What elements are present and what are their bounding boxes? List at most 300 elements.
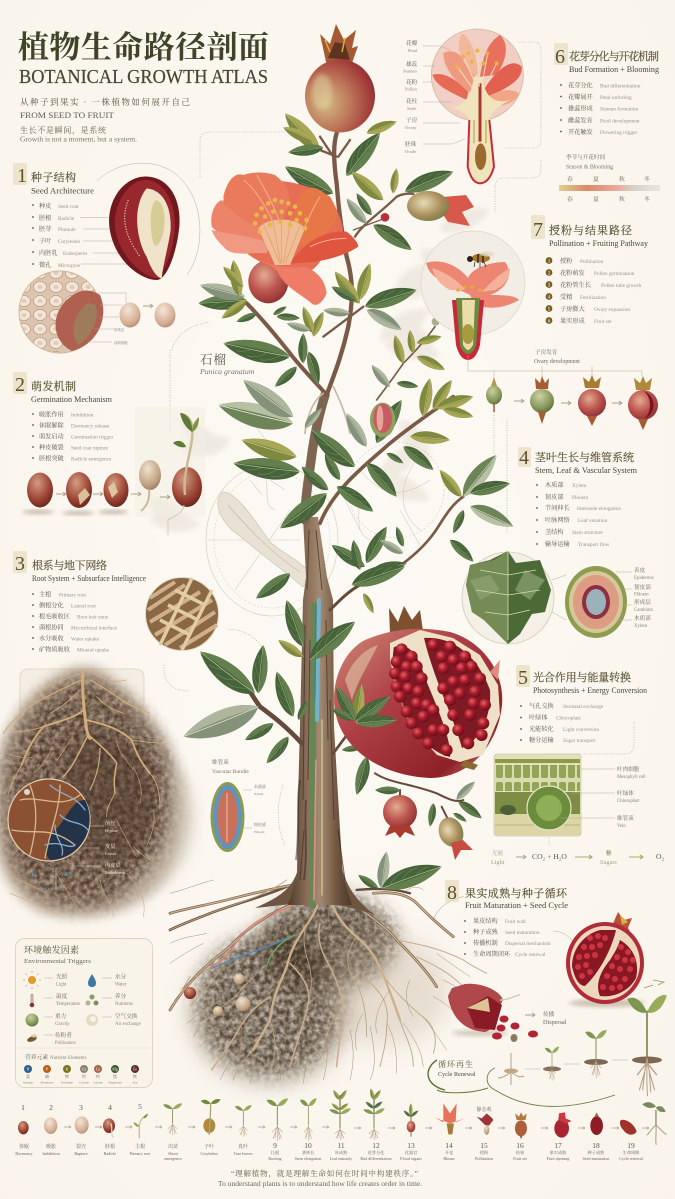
numbered list: 授粉 (560, 257, 573, 265)
list: 水分吸收 (39, 634, 65, 642)
section 8: fruit maturation: 传播 (543, 1010, 555, 1018)
aril chambers (393, 646, 450, 757)
list: 种皮 (39, 202, 51, 210)
list: Micropyle (58, 263, 81, 269)
environmental triggers panel: Iron (133, 1082, 138, 1084)
list: 木质部 (545, 481, 564, 489)
roots: lower mass and soil shadow (170, 880, 487, 1084)
stage labels: 5 (138, 1102, 142, 1111)
season chart: 夏 (593, 195, 599, 203)
list (32, 202, 88, 269)
season chart: 夏 (593, 175, 599, 183)
list: Primary root (59, 592, 86, 598)
list: Leaf venation (578, 517, 608, 524)
stage labels: 19 (627, 1141, 635, 1150)
environmental triggers panel: Water (115, 982, 127, 988)
equation: 糖 (606, 849, 612, 857)
section 5: photosynthesis: Photosynthesis + Energy Conversion (533, 686, 647, 695)
stage labels: Imbibition (42, 1151, 60, 1156)
list: Internode elongation (577, 506, 621, 512)
stage labels: Bloom (443, 1156, 455, 1161)
dark root undersides (170, 883, 453, 1010)
environmental triggers panel: Magnesium (108, 1082, 122, 1084)
stage labels: Seed maturation (583, 1156, 609, 1161)
list: 微孔 (39, 261, 51, 269)
environmental triggers panel: Pollinators (55, 1041, 76, 1046)
dotted connector arrows (164, 42, 634, 845)
environmental triggers panel: 光照 (56, 972, 68, 980)
vascular strip (312, 600, 322, 905)
stage labels: emergence (164, 1156, 182, 1161)
environmental triggers panel: 养分 (115, 992, 127, 1000)
vascular bundle detail: Xylem (254, 792, 264, 796)
root network (170, 880, 487, 1083)
section 4: stem and vascular: Stem, Leaf & Vascular System (535, 466, 638, 475)
list: 子叶 (39, 237, 52, 245)
section 3: root system (13, 551, 218, 654)
flower labels: 胚珠 (405, 140, 417, 148)
stage labels: 种子成熟 (588, 1149, 605, 1156)
list: 输导运输 (545, 540, 570, 548)
season chart: 冬 (644, 195, 650, 203)
broken fruit and scattered seeds (448, 984, 538, 1042)
lower branches and leaves (179, 558, 484, 896)
list: Root hair zone (77, 614, 109, 620)
list: 韧皮部 (545, 493, 564, 501)
list: Radicle (58, 216, 75, 222)
section 2: germination mechanism: Germination Mechanism (31, 395, 113, 404)
flower labels: 花瓣 (406, 39, 418, 47)
section 4: stem and vascular: 形成层 (634, 598, 651, 606)
environmental triggers panel: 空气交换 (115, 1012, 138, 1020)
title: Chinese: 植物生命路径剖面 (18, 30, 269, 65)
environmental triggers panel: Air exchange (115, 1022, 141, 1027)
numbered list: 6 (548, 319, 551, 324)
section 8: fruit maturation: Dispersal (543, 1019, 567, 1026)
stage labels: 主根 (135, 1143, 145, 1150)
numbered list: 4 (548, 295, 551, 300)
leaf circle (462, 551, 554, 644)
stage labels: 裂壳 (76, 1143, 86, 1150)
stage labels: 茎伸长 (302, 1149, 314, 1156)
closing quote: “理解植物，就是理解生命如何在时间中构建秩序。” (231, 1168, 418, 1179)
stage labels: 2 (49, 1103, 53, 1112)
root ball panel: Cortex (105, 851, 117, 856)
section 8: fruit maturation: 8 (447, 882, 457, 904)
stage labels: 胚根 (105, 1143, 115, 1150)
bee (467, 252, 494, 268)
list: 传播机制 (473, 939, 498, 947)
numbered list: 2 (548, 271, 551, 276)
large flower (211, 172, 358, 305)
section 5: photosynthesis: 叶绿体 (617, 789, 634, 797)
nutrient element badges (24, 1065, 139, 1073)
arils (389, 639, 491, 756)
stage labels: 真叶 (238, 1143, 248, 1150)
list: 胚根 (39, 214, 51, 222)
list: 节间伸长 (545, 504, 570, 512)
cut fruit (566, 912, 645, 1007)
root ball panel: Hyphae (105, 828, 118, 833)
list: 根毛吸收区 (39, 612, 70, 620)
list: Transport flow (578, 541, 610, 548)
petal base fill (223, 181, 343, 276)
list: Imbibition (71, 412, 94, 418)
equation: O₂ (656, 852, 664, 861)
vascular bundle detail: 木质部 (254, 784, 266, 789)
environmental triggers panel: Gravity (55, 1022, 70, 1027)
list: Dormancy release (71, 424, 110, 430)
numbered list: 子房膨大 (560, 305, 586, 313)
list: Seed maturation (505, 930, 540, 936)
stage labels: Stem elongation (295, 1156, 321, 1161)
flower labels (403, 39, 465, 154)
section 5: photosynthesis: 光合作用与能量转换 (533, 670, 631, 684)
section 3: root system: 根系与地下网络 (32, 558, 107, 572)
stage labels: 花芽分化 (368, 1149, 385, 1156)
season chart: 季节与开花时间 (566, 153, 606, 161)
nutrient element badges: Ca (82, 1068, 86, 1072)
list: 光能转化 (529, 725, 554, 733)
section 6: flower anatomy: Bud Formation + Blooming (569, 65, 659, 74)
stage labels: Bud differentiation (360, 1156, 392, 1161)
numbered list: 5 (548, 307, 551, 312)
list (520, 702, 604, 744)
numbered list: 1 (548, 259, 551, 264)
season chart: 秋 (619, 175, 625, 183)
trunk (288, 517, 352, 905)
flower labels: 雄蕊 (406, 60, 418, 68)
seed cross-section (109, 177, 180, 280)
list: Sugar transport (563, 738, 596, 744)
environmental triggers panel: Light (56, 982, 67, 988)
stage labels: Floral organs (400, 1156, 422, 1161)
list: 果皮结构 (473, 917, 498, 925)
seed shadows (22, 510, 128, 515)
cell texture circle (19, 271, 103, 353)
vascular bundle detail: Phloem (254, 830, 265, 834)
stage icons 11-19 (329, 1088, 667, 1145)
stage labels (15, 1102, 644, 1161)
stage labels: 果实成熟 (550, 1149, 567, 1156)
section 4: stem and vascular (462, 447, 654, 644)
numbered list: 受精 (560, 293, 572, 301)
ovary development sequence: 子房发育 (535, 348, 558, 356)
root ball panel: 菌丝 (105, 819, 115, 827)
environmental triggers panel: Potassium (61, 1082, 74, 1084)
season chart: 春 (567, 195, 573, 203)
root ball panel: H₂O (40, 888, 49, 893)
season chart: 冬 (644, 175, 650, 183)
flower labels: Pollen (405, 86, 417, 92)
list (464, 917, 551, 958)
stage labels: Radicle (104, 1151, 116, 1156)
stage labels: 11 (337, 1141, 345, 1150)
list: Bud differentiation (600, 82, 641, 90)
environmental triggers panel: 钙 (96, 1074, 100, 1079)
stage labels: 10 (304, 1141, 312, 1150)
stage labels: Dormancy (15, 1151, 34, 1156)
section header (554, 43, 568, 65)
list: 种皮破裂 (39, 444, 64, 452)
vascular bundle detail: Vascular Bundle (212, 769, 249, 775)
seedling cycle (498, 980, 667, 1096)
numbered list: Pollen germination (594, 271, 635, 277)
faint background foliage (145, 199, 493, 537)
small seeds (120, 302, 176, 328)
section 4: stem and vascular: 茎叶生长与维管系统 (535, 450, 634, 464)
list: Light conversion (563, 727, 599, 733)
numbered list: Pollen tube growth (601, 283, 642, 289)
numbered list: Pollination (580, 259, 604, 265)
stage labels: 花器官 (405, 1149, 417, 1156)
nutrient element badges: Fe (133, 1068, 137, 1072)
stage labels: 3 (79, 1103, 83, 1112)
section 4: stem and vascular: Epidermis (634, 576, 654, 581)
nutrient element badges: P (46, 1068, 48, 1072)
vascular bundle detail: 韧皮部 (254, 822, 266, 827)
section 1: seed architecture: 1 (17, 165, 27, 187)
main trunk and branches (179, 109, 517, 915)
season chart: 秋 (619, 195, 625, 203)
list: 雄蕊形成 (568, 104, 593, 112)
environmental triggers panel: 环境触发因素 (24, 944, 79, 955)
stage labels: 静态观 (476, 1106, 492, 1113)
flower labels: 花粉 (406, 78, 418, 86)
section 4: stem and vascular: 4 (519, 447, 529, 469)
season chart: Season & Blooming (566, 164, 613, 170)
section 4: stem and vascular: Cambium (634, 608, 653, 613)
list: Stamen formation (600, 106, 638, 112)
numbered list: 果实形成 (560, 317, 585, 325)
stage labels: 授粉 (480, 1149, 489, 1156)
root ball panel (0, 668, 196, 917)
section 8: fruit maturation (428, 880, 667, 1106)
list: 花瓣展开 (568, 93, 593, 101)
large cut pomegranate (330, 606, 502, 778)
section 7: pollination: 授粉与结果路径 (549, 223, 632, 237)
section 5: photosynthesis: 叶肉细胞 (617, 765, 640, 773)
list: 叶绿体 (529, 714, 548, 722)
list: 气孔交换 (529, 702, 555, 710)
section 5: photosynthesis (491, 665, 664, 866)
section 3: root system: Root System + Subsurface Intelligence (32, 574, 146, 583)
flower labels: Ovule (405, 149, 416, 154)
environmental triggers panel: 传粉者 (55, 1031, 72, 1039)
nutrient element badges: N (27, 1068, 30, 1072)
section 5: photosynthesis: 5 (518, 667, 528, 689)
flower labels: Stamen (403, 68, 417, 74)
nutrient element badges: Ca (96, 1068, 100, 1072)
numbered list: Fruit set (594, 319, 612, 325)
flower labels: 花柱 (406, 97, 418, 105)
stage labels: Leaf maturity (330, 1156, 353, 1161)
closing quote: To understand plants is to understand how life creates order in time. (218, 1180, 422, 1188)
cream interior (390, 630, 500, 762)
root ball panel: Endodermis (105, 870, 126, 875)
numbered list: Ovary expansion (594, 307, 630, 313)
flower bud on branch (407, 191, 474, 226)
leaves (339, 127, 386, 180)
environmental triggers panel: Nutrients (115, 1002, 133, 1007)
list (536, 481, 621, 548)
Chinese species name: 石榴 (200, 352, 226, 367)
numbered list: 3 (548, 283, 551, 288)
stage labels: True leaves (234, 1151, 253, 1156)
stage labels: Cotyledon (200, 1151, 218, 1156)
environmental triggers panel: Environmental Triggers (24, 958, 92, 965)
stem cross-section (565, 566, 627, 638)
title block (18, 30, 269, 144)
list: 主根 (39, 590, 51, 598)
section 5: photosynthesis: Mesophyll cell (617, 775, 646, 780)
top pomegranate fruit (305, 24, 375, 132)
list: Phloem (572, 495, 589, 501)
environmental triggers panel: 钙 (82, 1074, 86, 1079)
list: Lateral root (71, 604, 96, 610)
section 3: root system: 3 (15, 553, 25, 575)
stems (213, 133, 463, 563)
list: Plumule (58, 227, 76, 233)
section 6: flower anatomy (403, 29, 660, 203)
ovary development sequence (468, 348, 658, 430)
flower section circle (431, 29, 523, 183)
section 2: germination mechanism: 2 (15, 374, 25, 396)
vascular bundle detail: 维管束 (212, 758, 229, 766)
environmental triggers panel: 营养元素 (25, 1053, 48, 1061)
bundle oval (210, 782, 244, 852)
section 2: germination mechanism: 萌发机制 (31, 379, 76, 393)
stage arrows (64, 1126, 649, 1129)
foreground leaves over fruit (330, 684, 397, 729)
list: Mycorrhizal interface (71, 624, 118, 632)
environmental triggers panel: 磷 (45, 1074, 49, 1079)
environmental triggers panel: 氮 (26, 1074, 30, 1079)
title block: Growth is not a moment, but a system. (20, 136, 137, 144)
list (32, 590, 118, 654)
nutrient element badges: K (66, 1068, 69, 1072)
list: 糖分运输 (529, 736, 554, 744)
flower labels: 子房 (406, 116, 418, 124)
environmental triggers panel: Calcium (93, 1082, 104, 1084)
vascular bundle detail (210, 758, 266, 852)
stage labels: 17 (554, 1141, 562, 1150)
list (32, 410, 113, 462)
ovary (248, 260, 288, 303)
list: Cotyledon (58, 239, 80, 245)
list: Flowering trigger (600, 130, 637, 136)
list: Stem structure (572, 530, 603, 536)
subtitle: 从种子到果实 · 一株植物如何展开自己 (20, 96, 190, 107)
section 4: stem and vascular: Phloem (634, 592, 649, 598)
Latin species name: Punica granatum (199, 367, 255, 376)
germinating seeds (27, 413, 202, 535)
stage labels: 18 (592, 1141, 600, 1150)
list: 花芽分化 (568, 82, 593, 90)
list: Stomatal exchange (563, 704, 604, 710)
list: Xylem (572, 483, 587, 489)
section 5: photosynthesis: Chloroplast (617, 799, 640, 804)
equation: Light (491, 859, 505, 866)
stage labels: Fruit set (513, 1156, 528, 1161)
trigger icons (23, 971, 98, 1043)
list: 生命周期闭环 (473, 950, 511, 958)
magnifier with hyphae (8, 779, 90, 861)
stage labels: 叶成熟 (335, 1149, 348, 1156)
numbered list: Fertilization (580, 295, 606, 301)
list: Fruit wall (505, 919, 526, 925)
environmental triggers panel: Nutrient Elements (50, 1056, 87, 1061)
section 5: photosynthesis: Vein (617, 824, 626, 829)
environmental triggers panel: Temperature (56, 1002, 80, 1007)
list: 胚根突破 (39, 454, 65, 462)
stage labels: 16 (516, 1141, 524, 1150)
flower labels: Style (407, 106, 416, 111)
mid bud and small berries (370, 403, 395, 437)
list: Petal unfurling (600, 94, 632, 101)
stage labels: Cycle renewal (619, 1156, 644, 1161)
title: English: BOTANICAL GROWTH ATLAS (19, 67, 268, 88)
list: 内胚乳 (39, 249, 58, 257)
title block: FROM SEED TO FRUIT (20, 110, 115, 120)
stage labels: 结果 (516, 1149, 525, 1156)
stage labels: 4 (108, 1103, 112, 1112)
flower labels: Petal (408, 48, 418, 53)
section 5: photosynthesis: 维管束 (617, 814, 634, 822)
title block: 生长不是瞬间，是系统 (20, 125, 106, 136)
list: 茎结构 (545, 528, 564, 536)
list: 雌蕊发育 (568, 116, 593, 124)
environmental triggers panel: 镁 (113, 1074, 117, 1079)
stage labels: 1 (21, 1103, 25, 1112)
stage labels: 开花 (445, 1149, 453, 1156)
list: Chloroplast (556, 716, 581, 722)
cycle renewal label and arrows: 循环再生 (438, 1059, 473, 1069)
section 6: flower anatomy: 花芽分化与开花机制 (569, 49, 659, 63)
stage labels: 9 (273, 1141, 277, 1150)
cycle renewal label and arrows: Cycle Renewal (438, 1071, 476, 1078)
section 1: seed architecture: 种子结构 (31, 170, 76, 184)
list: 种子成熟 (473, 928, 499, 936)
growth timeline (15, 1088, 667, 1161)
list: Germination trigger (71, 434, 113, 440)
section 2: germination mechanism (13, 372, 205, 535)
stage labels: Rooting (268, 1156, 282, 1161)
soil nodules (184, 974, 250, 1016)
flower labels: Ovary (405, 125, 417, 130)
section 8: fruit maturation: Fruit Maturation + Seed Cycle (465, 901, 568, 910)
list: Endosperm (63, 251, 88, 257)
petals (223, 172, 289, 233)
root lattice circle (146, 578, 218, 650)
stage labels: 子叶 (204, 1143, 214, 1150)
colored transport lines in roots (210, 883, 315, 968)
environmental triggers panel: 重力 (55, 1012, 67, 1020)
environmental triggers panel: 钾 (65, 1074, 69, 1079)
list: Cycle renewal (515, 952, 546, 958)
section 6: flower anatomy: 6 (555, 46, 565, 68)
root ball panel: 内皮层 (105, 861, 121, 869)
environmental triggers panel: Nitrogen (23, 1082, 34, 1084)
section 4: stem and vascular: 木质部 (634, 614, 651, 622)
stage labels: 吸胀 (46, 1143, 56, 1150)
section 7: pollination: Pollination + Fruiting Pathway (549, 239, 648, 248)
section 4: stem and vascular: 韧皮部 (634, 583, 651, 591)
stage labels: 生命周期 (623, 1149, 640, 1156)
pollination flower (421, 231, 525, 360)
section 4: stem and vascular: Xylem (634, 624, 647, 629)
stage labels: 扎根 (271, 1149, 280, 1156)
